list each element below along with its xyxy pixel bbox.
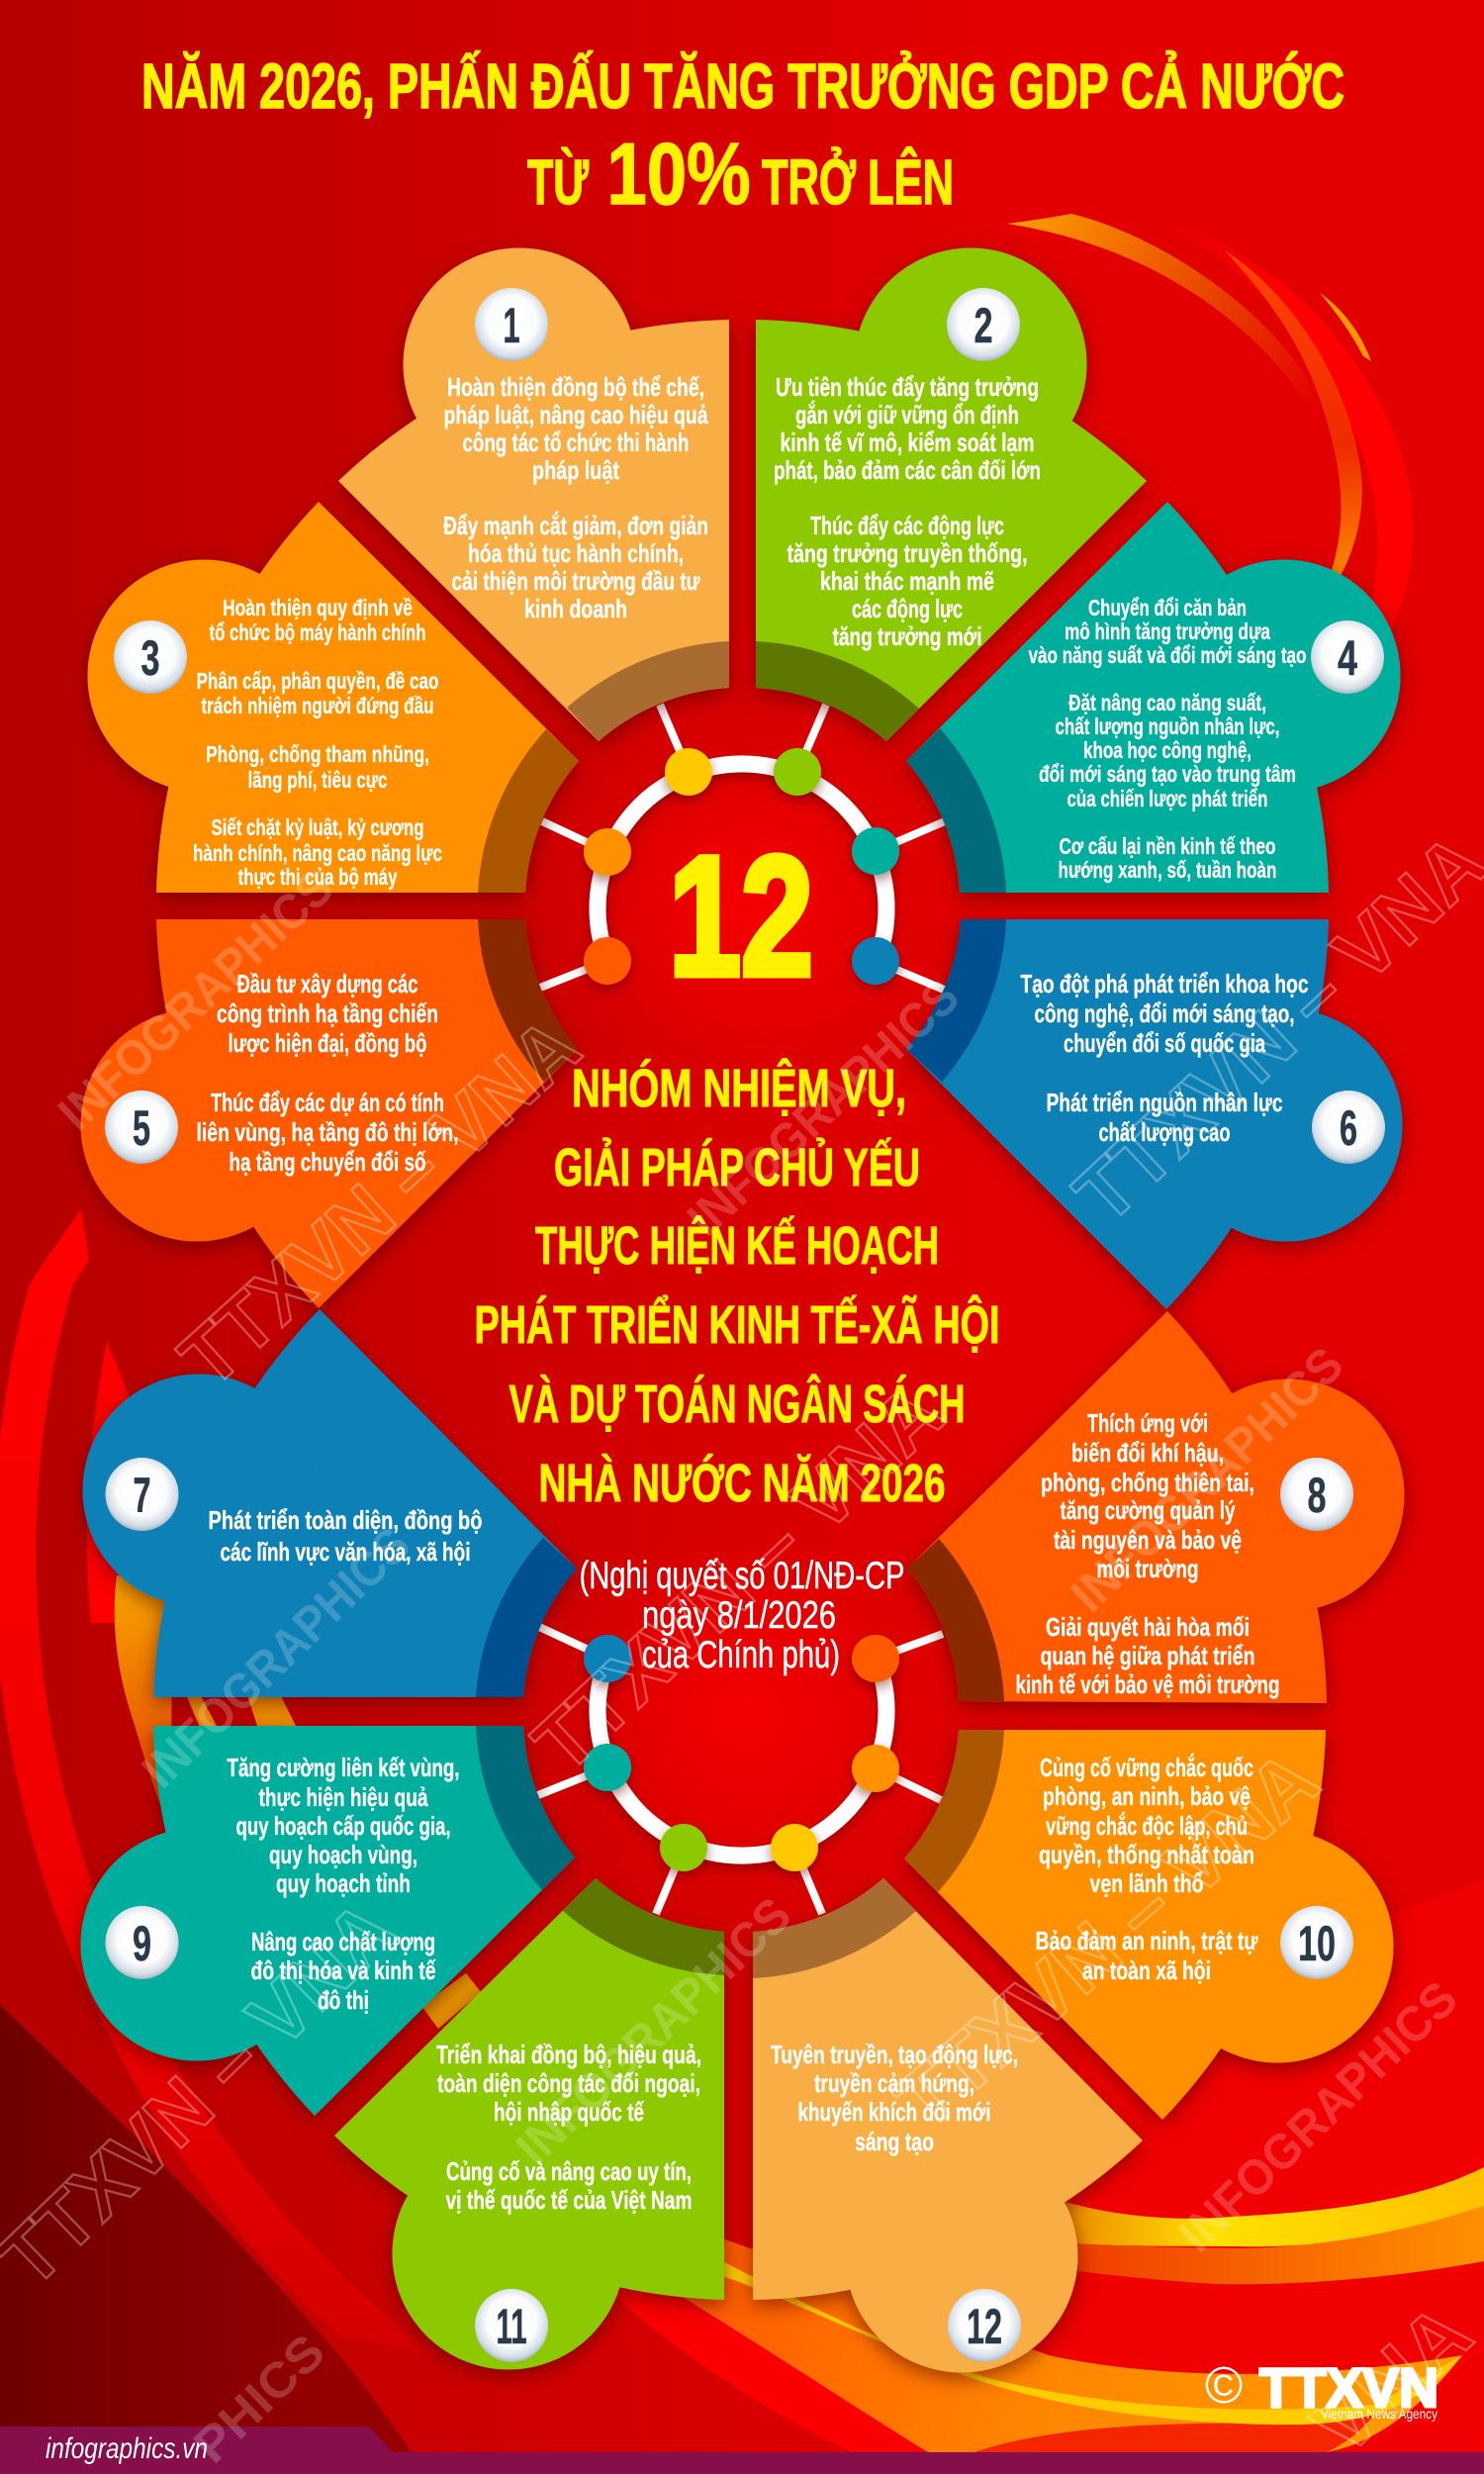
panel 3: trách nhiệm người đứng đầu <box>202 693 433 718</box>
panel 8: tăng cường quản lý <box>1061 1495 1236 1525</box>
watermarks: TTXVN – VNA <box>163 1001 597 1404</box>
panel 2 <box>756 247 1147 741</box>
panel 11 <box>334 1878 724 2369</box>
central heading <box>475 1058 999 1513</box>
panel 3: lãng phí, tiêu cực <box>247 767 388 793</box>
resolution reference: (Nghị quyết số 01/NĐ-CP <box>580 1555 904 1597</box>
panel 4: mô hình tăng trưởng dựa <box>1065 618 1271 644</box>
logo: TTXVN: TTXVN <box>1259 2356 1438 2419</box>
footer website: infographics.vn <box>46 2432 208 2465</box>
panel 2: Ưu tiên thúc đẩy tăng trưởng <box>776 372 1039 402</box>
panel 11: toàn diện công tác đối ngoại, <box>437 2068 700 2098</box>
resolution reference: ngày 8/1/2026 <box>642 1594 836 1637</box>
panel 1: pháp luật, nâng cao hiệu quả <box>443 400 708 429</box>
watermarks <box>0 817 1484 2473</box>
watermarks: INFOGRAPHICS <box>506 1887 801 2175</box>
panel 1: 1 <box>503 298 520 353</box>
panel 1: Hoàn thiện đồng bộ thể chế, <box>447 372 704 402</box>
panel 9: quy hoạch vùng, <box>269 1840 417 1869</box>
panel 6: Phát triển nguồn nhân lực <box>1047 1088 1282 1117</box>
panel 8: kinh tế với bảo vệ môi trường <box>1015 1669 1280 1699</box>
panel 9: quy hoạch cấp quốc gia, <box>235 1811 451 1841</box>
panel 1: pháp luật <box>532 455 619 485</box>
panel 7: Phát triển toàn diện, đồng bộ <box>208 1505 483 1535</box>
title: 10% <box>607 125 750 223</box>
lower ring with nodes <box>538 1627 943 1914</box>
panel 5: công trình hạ tầng chiến <box>217 999 438 1028</box>
background swoosh: left and bottom ribbons <box>0 1209 1484 2474</box>
watermarks: TTXVN – VNA <box>879 1734 1336 2147</box>
title: TRỞ LÊN <box>762 145 954 218</box>
watermarks: INFOGRAPHICS <box>677 969 970 1247</box>
panel 6: công nghệ, đổi mới sáng tạo, <box>1035 999 1294 1028</box>
panel 10: phòng, an ninh, bảo vệ <box>1043 1781 1251 1811</box>
panel 6: chất lượng cao <box>1098 1117 1231 1147</box>
panel 9: 9 <box>133 1916 151 1971</box>
panel 7: các lĩnh vực văn hóa, xã hội <box>220 1537 471 1567</box>
panel 1: cải thiện môi trường đầu tư <box>451 566 700 596</box>
panel 2: kinh tế vĩ mô, kiểm soát lạm <box>780 428 1035 457</box>
panel 8: môi trường <box>1096 1554 1199 1583</box>
panel 2: tăng trưởng truyền thống, <box>788 538 1027 568</box>
title <box>141 49 1345 223</box>
watermarks: PHICS <box>183 2324 335 2473</box>
panel 2: Thúc đẩy các động lực <box>810 511 1004 540</box>
panel 9: thực hiện hiệu quả <box>259 1782 428 1812</box>
panel 2: các động lực <box>852 594 963 623</box>
background swoosh: top right arcs <box>1007 214 1413 647</box>
panel 3: tổ chức bộ máy hành chính <box>210 619 425 645</box>
panel 5: hạ tầng chuyển đổi số <box>230 1147 426 1177</box>
logo: TTXVN: © <box>1205 2357 1243 2415</box>
watermarks: VNA <box>1296 2287 1484 2473</box>
panel 6 <box>906 919 1403 1309</box>
panel 12: truyền cảm hứng, <box>814 2068 974 2098</box>
panel 11: Củng cố và nâng cao uy tín, <box>446 2156 692 2186</box>
panel 10 <box>904 1730 1393 2120</box>
panel 12: sáng tạo <box>855 2127 934 2156</box>
big number 12: 12 <box>669 821 813 1011</box>
panel 4: đổi mới sáng tạo vào trung tâm <box>1039 761 1296 787</box>
panel 8 <box>907 1311 1405 1703</box>
panel 4: khoa học công nghệ, <box>1083 737 1252 763</box>
panel 3: thực thi của bộ máy <box>237 864 398 890</box>
panel 12: 12 <box>967 2299 1002 2354</box>
panel 1 <box>338 247 729 741</box>
panel 2: khai thác mạnh mẽ <box>820 566 994 596</box>
central heading: GIẢI PHÁP CHỦ YẾU <box>554 1138 920 1197</box>
panel 10: an toàn xã hội <box>1082 1955 1211 1985</box>
panel 8: Giải quyết hài hòa mối <box>1046 1612 1250 1642</box>
panel 9: Nâng cao chất lượng <box>251 1927 435 1956</box>
panel 10: vững chắc độc lập, chủ <box>1046 1811 1248 1841</box>
panel 4: của chiến lược phát triển <box>1067 786 1268 811</box>
watermarks: INFOGRAPHICS <box>1168 1970 1468 2262</box>
central heading: VÀ DỰ TOÁN NGÂN SÁCH <box>509 1374 966 1434</box>
panel 9: đô thị <box>318 1985 369 2015</box>
panel 5: lược hiện đại, đồng bộ <box>228 1028 427 1058</box>
panel 9 <box>81 1726 575 2116</box>
panel 6: Tạo đột phá phát triển khoa học <box>1021 969 1308 999</box>
panel 5 <box>81 919 578 1308</box>
panel 4: chất lượng nguồn nhân lực, <box>1055 714 1280 739</box>
panel 9: Tăng cường liên kết vùng, <box>228 1753 459 1782</box>
logo: TTXVN: Vietnam News Agency <box>1321 2406 1438 2422</box>
central heading: PHÁT TRIỂN KINH TẾ-XÃ HỘI <box>475 1294 999 1355</box>
panel 2: 2 <box>974 298 993 353</box>
central heading: NHÀ NƯỚC NĂM 2026 <box>538 1454 946 1513</box>
panel 1: công tác tổ chức thi hành <box>463 428 689 457</box>
panel 8: 8 <box>1308 1468 1326 1523</box>
panel 10: 10 <box>1298 1916 1336 1971</box>
panel 3: Hoàn thiện quy định về <box>223 595 413 620</box>
panel 6: chuyển đổi số quốc gia <box>1064 1028 1265 1058</box>
panel 1: hóa thủ tục hành chính, <box>468 538 684 568</box>
panel 4: hướng xanh, số, tuần hoàn <box>1059 857 1276 883</box>
panel 4 <box>906 502 1401 893</box>
resolution reference: của Chính phủ) <box>642 1634 840 1676</box>
panel 10: Bảo đảm an ninh, trật tự <box>1035 1926 1258 1955</box>
panel 4: vào năng suất và đổi mới sáng tạo <box>1029 642 1306 668</box>
panel 11: 11 <box>497 2299 526 2354</box>
panel 12: Tuyên truyền, tạo động lực, <box>771 2040 1018 2069</box>
panel 5: Đầu tư xây dựng các <box>237 969 417 999</box>
panel 11: vị thế quốc tế của Việt Nam <box>445 2185 693 2215</box>
footer bar <box>0 2426 1484 2474</box>
panel 4: 4 <box>1338 630 1357 686</box>
panel 3: Phân cấp, phân quyền, đề cao <box>196 668 439 694</box>
panel 10: vẹn lãnh thổ <box>1090 1868 1203 1898</box>
panel 11: hội nhập quốc tế <box>494 2097 644 2127</box>
panel 2: gắn với giữ vững ổn định <box>795 400 1019 429</box>
panel 10: quyền, thống nhất toàn <box>1039 1840 1254 1869</box>
panel 9: quy hoạch tỉnh <box>276 1868 411 1898</box>
panel 8: tài nguyên và bảo vệ <box>1054 1525 1242 1555</box>
panel 2: tăng trưởng mới <box>833 621 981 651</box>
panel 8: biến đổi khí hậu, <box>1071 1438 1224 1468</box>
panel 9: đô thị hóa và kinh tế <box>251 1955 436 1985</box>
panel 1: kinh doanh <box>524 594 627 623</box>
panel 2: phát, bảo đảm các cân đối lớn <box>774 455 1041 485</box>
watermarks: TTXVN – VNA <box>516 1368 961 1790</box>
panel 4: Chuyển đổi căn bản <box>1088 595 1247 620</box>
panel 1: Đẩy mạnh cắt giảm, đơn giản <box>443 511 708 540</box>
central heading: THỰC HIỆN KẾ HOẠCH <box>535 1215 939 1276</box>
panel 10: Củng cố vững chắc quốc <box>1040 1753 1253 1782</box>
panel 8: quan hệ giữa phát triển <box>1041 1641 1254 1670</box>
panel 5: 5 <box>133 1100 150 1156</box>
panel 5: liên vùng, hạ tầng đô thị lớn, <box>196 1117 459 1147</box>
panel 8: Thích ứng với <box>1087 1408 1208 1438</box>
panel 4: Cơ cấu lại nền kinh tế theo <box>1059 833 1276 859</box>
panel 4: Đặt nâng cao năng suất, <box>1068 690 1266 715</box>
panel 11: Triển khai đồng bộ, hiệu quả, <box>436 2040 701 2069</box>
panel 12: khuyến khích đổi mới <box>797 2097 991 2127</box>
panel 8: phòng, chống thiên tai, <box>1041 1468 1254 1497</box>
watermarks: INFOGRAPHICS <box>132 1517 420 1798</box>
panel 3: Phòng, chống tham nhũng, <box>206 741 429 767</box>
upper ring with nodes <box>540 705 945 990</box>
panel 12 <box>753 1878 1143 2373</box>
watermarks: INFOGRAPHICS <box>47 859 344 1141</box>
panel 5: Thúc đẩy các dự án có tính <box>211 1088 444 1117</box>
panel 3: hành chính, nâng cao năng lực <box>193 840 442 866</box>
title: TỪ <box>527 146 590 218</box>
watermarks: INFOGRAPHICS <box>1061 1336 1353 1622</box>
panel 3: Siết chặt kỷ luật, kỷ cương <box>212 814 423 840</box>
panel 3 <box>87 502 579 893</box>
panel 6: 6 <box>1340 1100 1357 1156</box>
panel 3: 3 <box>140 630 160 686</box>
central heading: NHÓM NHIỆM VỤ, <box>572 1058 906 1118</box>
resolution reference <box>580 1555 904 1676</box>
panel 7: 7 <box>133 1468 150 1523</box>
panel 7 <box>83 1309 577 1697</box>
